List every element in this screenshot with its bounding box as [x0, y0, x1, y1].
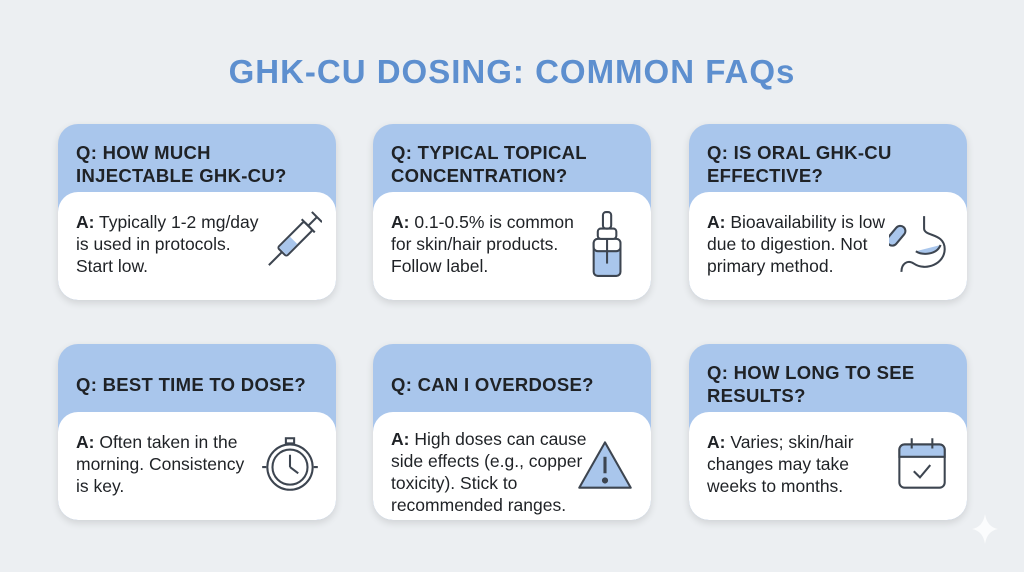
answer 4: is key.: [76, 476, 124, 496]
answer 3: [689, 192, 967, 300]
question 2: [391, 142, 587, 186]
answer 6: [689, 412, 967, 520]
answer 5: [373, 412, 651, 520]
answer 1: is used in protocols.: [76, 234, 231, 254]
panel: injectable: [58, 124, 336, 300]
icon: clock: [262, 437, 318, 491]
answer 6: changes may take: [707, 454, 849, 474]
answer 5: A: High doses can cause: [391, 429, 587, 449]
answer 2: [373, 192, 651, 300]
title: GHK-CU DOSING: COMMON FAQs: [229, 53, 795, 90]
question 6: [707, 362, 915, 406]
panel: best time: [58, 344, 336, 520]
icon: stomach and pill: [889, 216, 946, 272]
question 3: Q: IS ORAL GHK-CU: [707, 142, 892, 163]
answer 6: A: Varies; skin/hair: [707, 432, 854, 452]
icon: dropper bottle: [592, 211, 622, 277]
answer 5: side effects (e.g., copper: [391, 451, 582, 471]
answer 6: weeks to months.: [707, 476, 843, 496]
answer 2: A: 0.1-0.5% is common: [391, 212, 574, 232]
question 3: [707, 142, 892, 186]
answer 3: due to digestion. Not: [707, 234, 868, 254]
question 2: CONCENTRATION?: [391, 165, 568, 186]
answer 4: [58, 412, 336, 520]
answer 4: A: Often taken in the: [76, 432, 237, 452]
question 6: RESULTS?: [707, 385, 806, 406]
question 5: Q: CAN I OVERDOSE?: [391, 374, 594, 394]
answer 2: Follow label.: [391, 256, 488, 276]
answer 5: recommended ranges.: [391, 495, 566, 515]
answer 2: for skin/hair products.: [391, 234, 558, 254]
panel: oral: [689, 124, 967, 300]
panel: overdose: [373, 344, 651, 520]
answer 3: primary method.: [707, 256, 833, 276]
answer 3: A: Bioavailability is low: [707, 212, 885, 232]
answer 4: morning. Consistency: [76, 454, 244, 474]
panel: results: [689, 344, 967, 520]
icon: syringe: [268, 211, 322, 266]
answer 5: toxicity). Stick to: [391, 473, 517, 493]
answer 1: A: Typically 1-2 mg/day: [76, 212, 259, 232]
question 3: EFFECTIVE?: [707, 165, 823, 186]
icon: warning: [578, 441, 632, 489]
question 4: Q: BEST TIME TO DOSE?: [76, 374, 306, 394]
panel: topical: [373, 124, 651, 300]
icon: calendar: [898, 438, 946, 489]
question 1: [76, 142, 287, 186]
question 1: Q: HOW MUCH: [76, 142, 211, 163]
answer 1: Start low.: [76, 256, 148, 276]
question 2: Q: TYPICAL TOPICAL: [391, 142, 587, 163]
question 6: Q: HOW LONG TO SEE: [707, 362, 915, 383]
question 1: INJECTABLE GHK-CU?: [76, 165, 287, 186]
icon: sparkle: [973, 516, 997, 542]
answer 1: [58, 192, 336, 300]
